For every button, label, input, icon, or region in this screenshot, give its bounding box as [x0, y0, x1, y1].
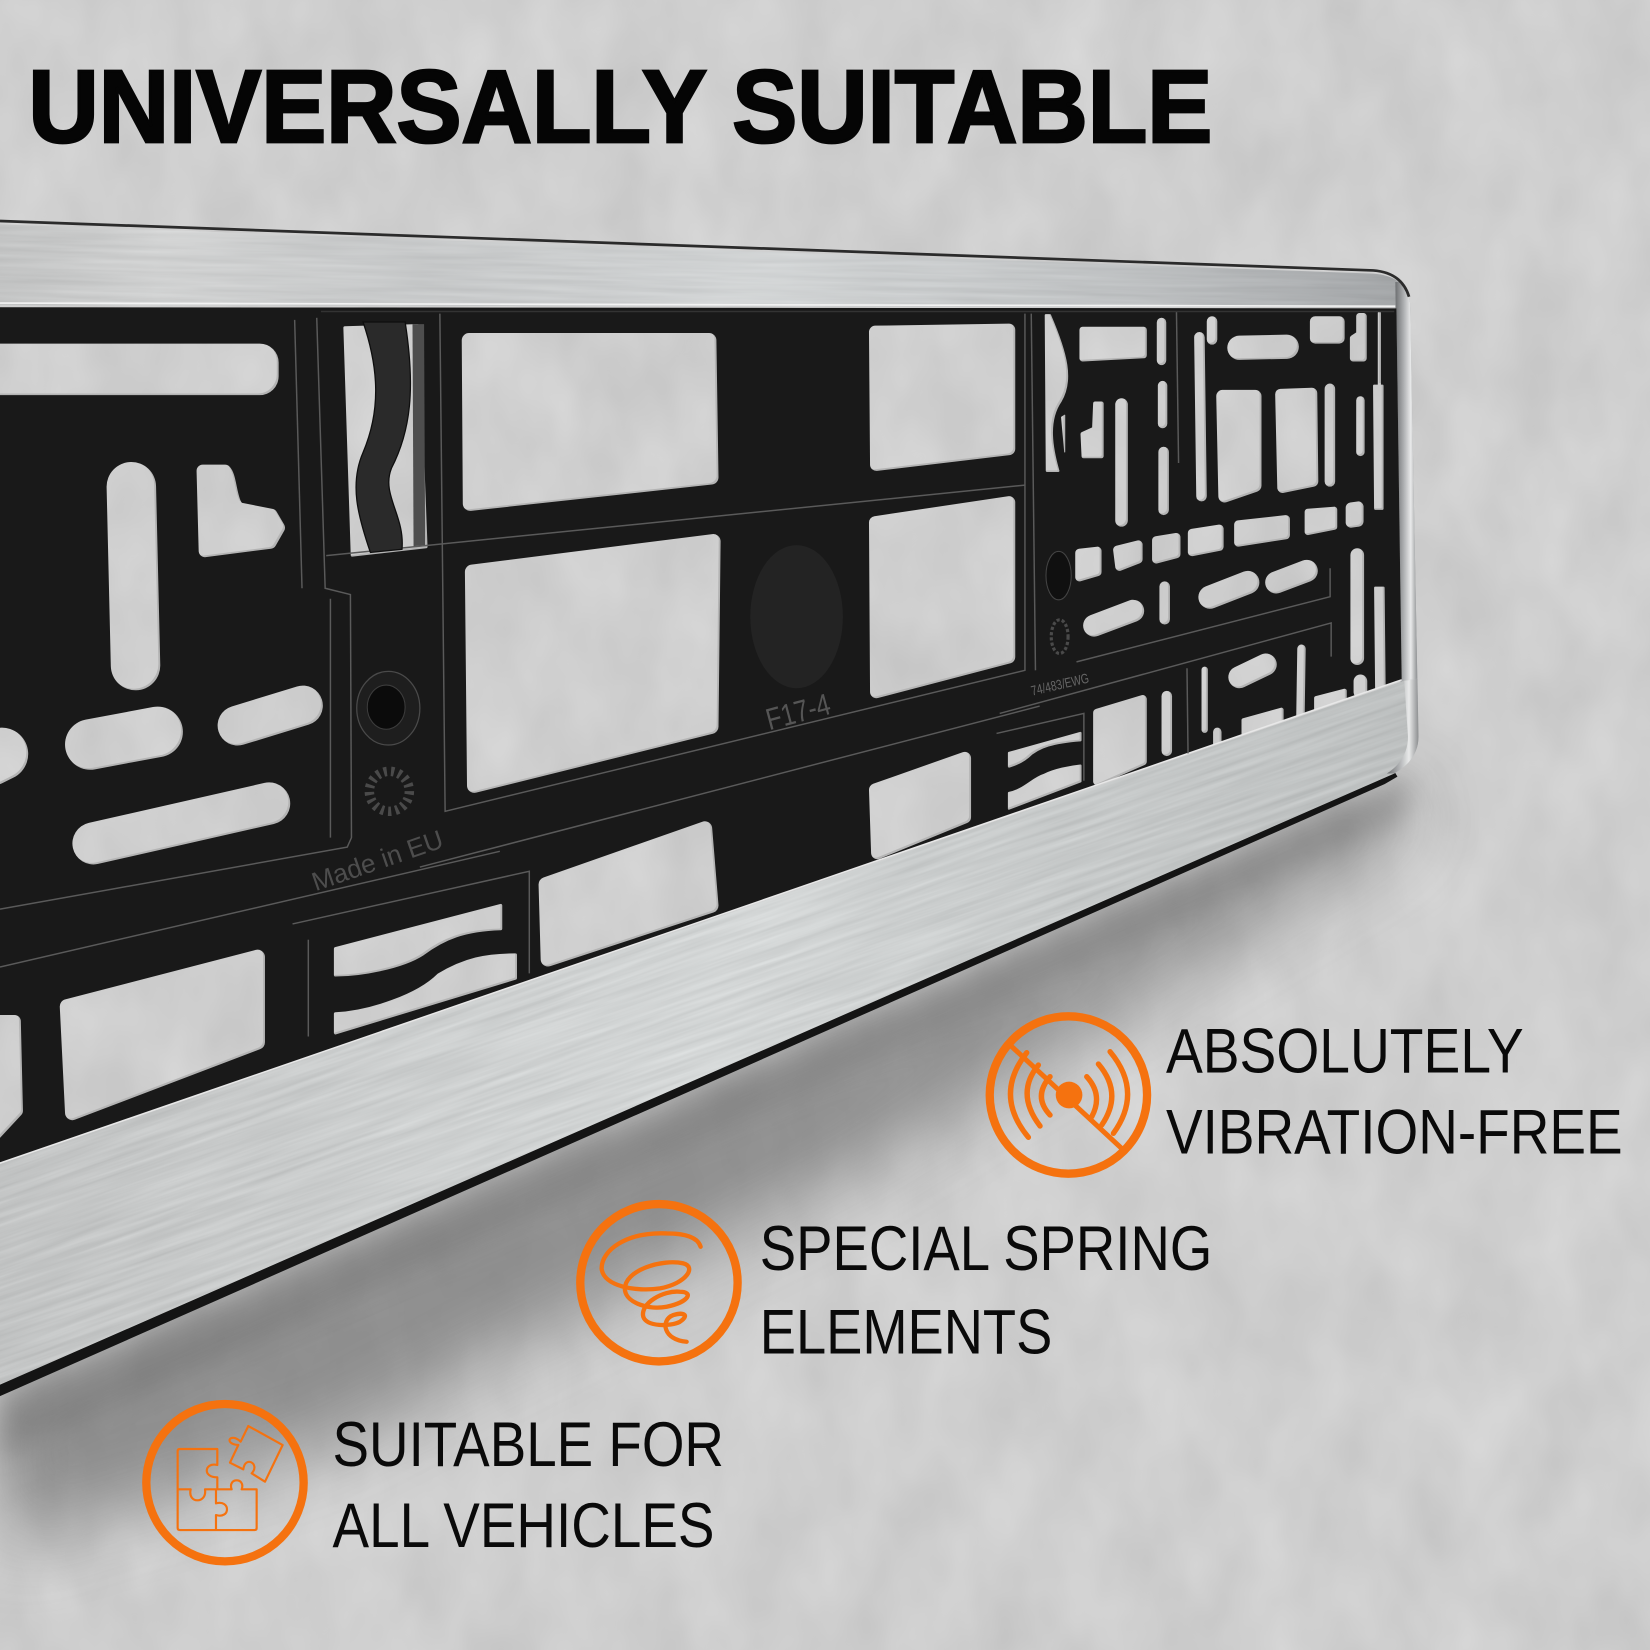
- label: special spring elements: [760, 1214, 1212, 1367]
- label: suitable for all vehicles: [333, 1410, 724, 1561]
- spring clip: side strip: [412, 324, 425, 546]
- top inner highlight: [0, 303, 1395, 306]
- feature: vibration-free: [990, 1016, 1623, 1174]
- icon: puzzle: [146, 1404, 304, 1561]
- moulded ribs: [0, 311, 1394, 1037]
- bottom black edge: [0, 771, 1397, 1399]
- top dark edge line: [0, 221, 1409, 297]
- strip top highlight: [0, 680, 1402, 1165]
- label: suitable for all vehicles: SUITABLE FOR: [333, 1410, 724, 1480]
- embossed text: made in eu: Made in EU: [308, 824, 447, 897]
- embossed text: f17-4: F17-4: [762, 687, 834, 737]
- round centre disc: [750, 545, 843, 688]
- label: special spring elements: ELEMENTS: [760, 1297, 1052, 1367]
- feature: spring elements: [580, 1204, 1212, 1367]
- label: absolutely vibration-free: [1166, 1016, 1623, 1167]
- label: suitable for all vehicles: ALL VEHICLES: [333, 1491, 715, 1561]
- black backing panel rim highlight: [0, 307, 1402, 1165]
- label: special spring elements: SPECIAL SPRING: [760, 1214, 1212, 1284]
- spring clip: curved band: [356, 322, 410, 552]
- small emblem right: [1051, 620, 1068, 653]
- lower silver strip: [0, 678, 1418, 1385]
- title: UNIVERSALLY SUITABLE: [28, 49, 1212, 164]
- number plate holder: [0, 220, 1418, 1396]
- black backing panel with cut-outs: [0, 307, 1402, 1165]
- embossed text: approval number: 74/483/EWG: [1030, 671, 1090, 698]
- small screw hole right: [1046, 551, 1071, 600]
- icon: spring: [580, 1204, 738, 1361]
- top silver band: [0, 224, 1418, 682]
- screw hole: [357, 671, 420, 745]
- plate cast shadow: [0, 773, 1410, 1547]
- feature: all vehicles: [146, 1404, 724, 1561]
- manufacturing emblem: [369, 771, 409, 811]
- icon: vibration crossed out: [990, 1016, 1147, 1174]
- label: absolutely vibration-free: ABSOLUTELY: [1166, 1016, 1524, 1086]
